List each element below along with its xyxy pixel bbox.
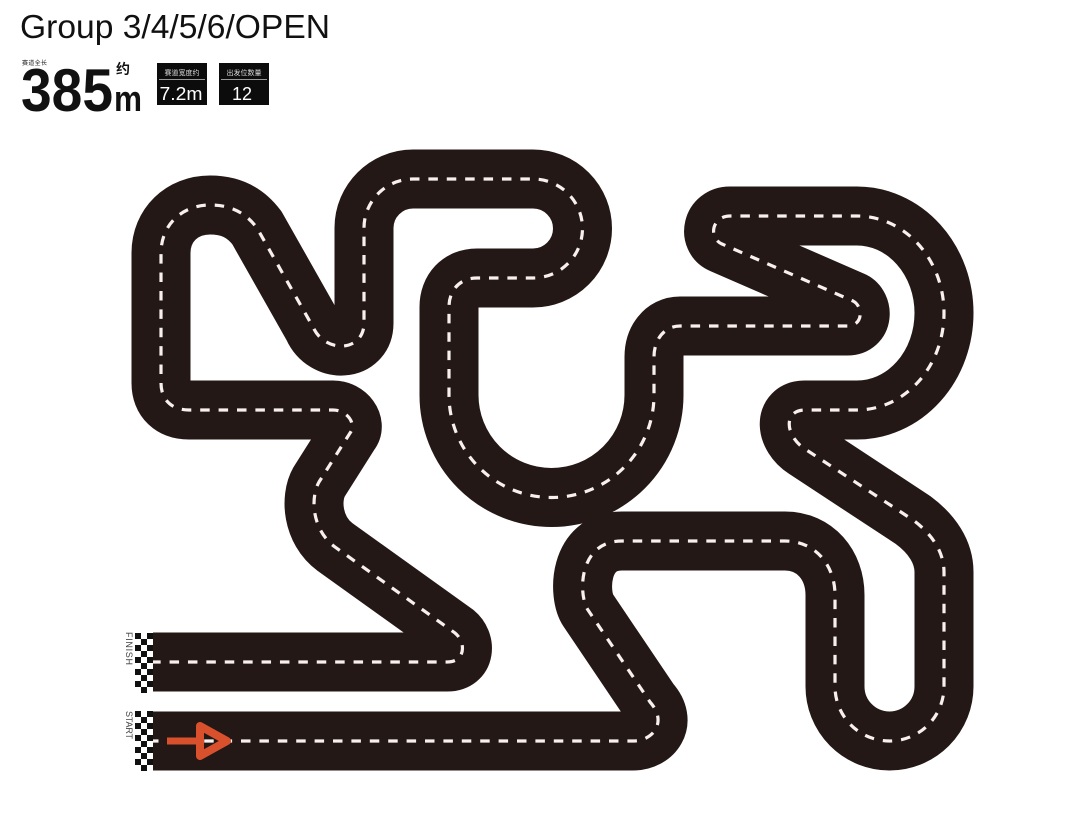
- stat: track width: 赛道宽度约: [164, 68, 200, 77]
- start line: [124, 711, 153, 771]
- finish line: FINISH: [124, 632, 134, 665]
- stat: track length: 385: [21, 57, 113, 124]
- icon: start direction arrow: [167, 726, 227, 756]
- title: Group 3/4/5/6/OPEN: [20, 8, 330, 45]
- stat: starting positions: [219, 63, 269, 105]
- stat: starting positions: 12: [232, 84, 252, 104]
- race track: [153, 179, 944, 741]
- finish line: [124, 632, 153, 693]
- stat: starting positions: 出发位数量: [226, 68, 262, 77]
- stat: track length: 赛道全长: [22, 59, 47, 67]
- stat: track width: [157, 63, 207, 105]
- stat: track length: m: [114, 78, 142, 119]
- start line: START: [124, 711, 134, 740]
- stat: track width: 7.2m: [160, 84, 202, 104]
- stat: track length: 约: [116, 61, 130, 77]
